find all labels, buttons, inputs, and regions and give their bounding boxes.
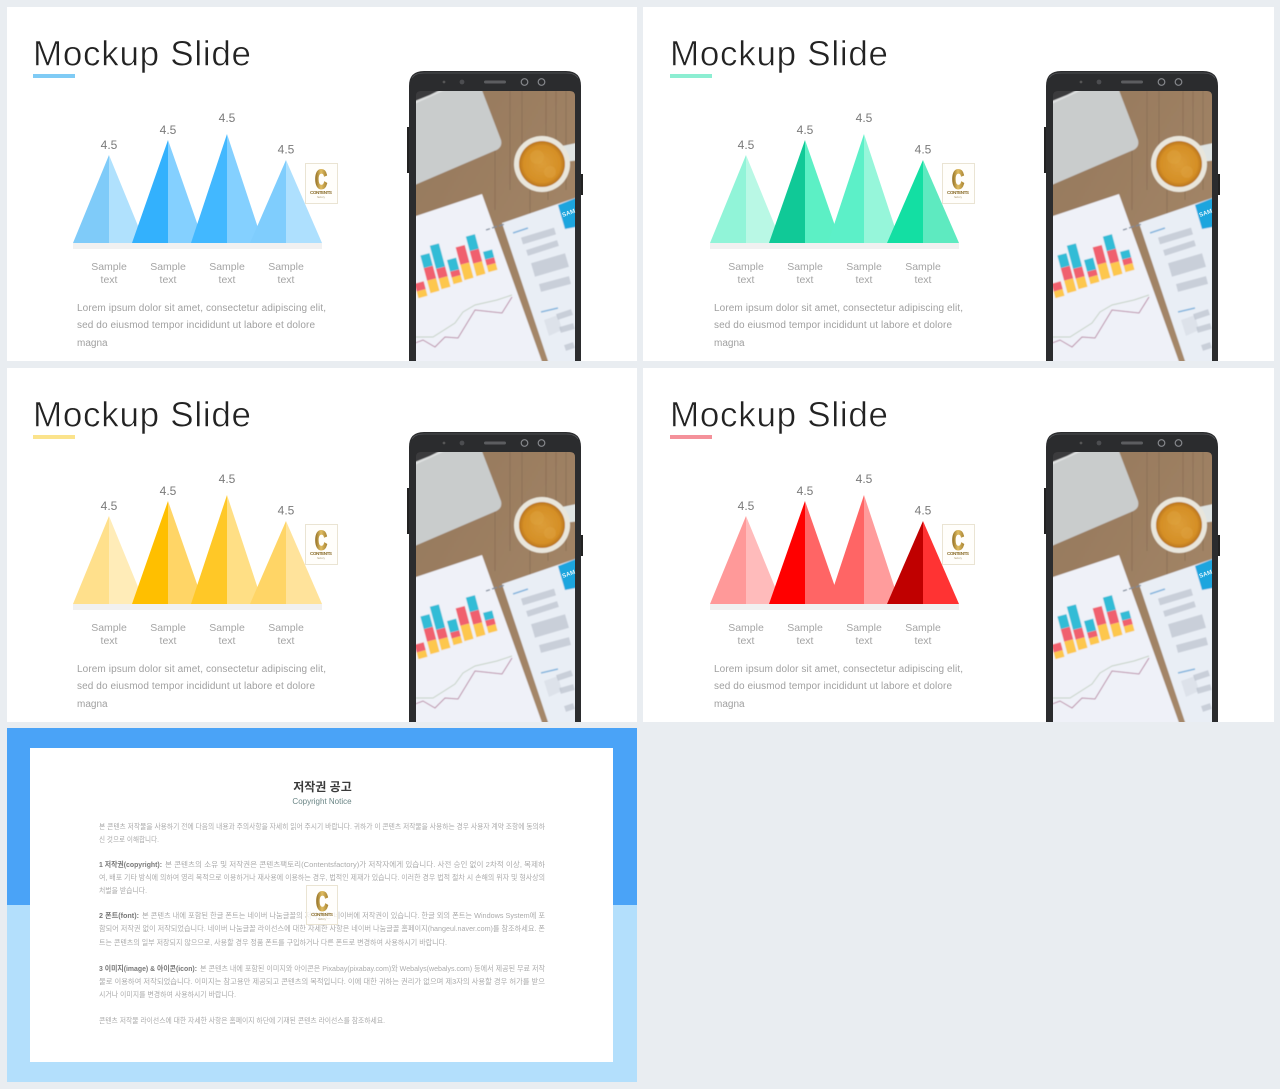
section 3: image and icon: 3 이미지(image) & 아이콘(icon): xyxy=(99,963,197,973)
triangle chart: 4.5 xyxy=(738,138,755,152)
intro paragraph: 본 콘텐츠 저작물을 사용하기 전에 다음의 내용과 주의사항을 자세히 읽어 주시기 바랍니다. 귀하가 이 콘텐츠 저작물을 사용하는 경우 사용자 계약 조항에 동의하 xyxy=(99,821,545,831)
chart labels: Sample xyxy=(150,261,186,273)
notice subheading: Copyright Notice xyxy=(292,797,352,806)
section 1: copyright: 1 저작권(copyright): xyxy=(99,859,162,869)
section 1: copyright xyxy=(99,859,545,895)
section 2: font: 본 콘텐츠 내에 포함된 한글 폰트는 네이버 나눔글꼴의 저작권은 네이버에 저작권이 있습니다. 한글 외의 폰트는 Windows System에 포 xyxy=(142,910,545,920)
chart labels: Sample xyxy=(91,261,127,273)
watermark logo: CONTENTS xyxy=(310,551,332,556)
chart labels xyxy=(91,261,304,286)
chart labels: text xyxy=(219,635,236,647)
triangle chart: 4.5 xyxy=(219,472,236,486)
phone mockup with desk photo: SAM xyxy=(562,570,576,580)
chart labels: text xyxy=(101,274,118,286)
triangle chart: 4.5 xyxy=(797,484,814,498)
watermark logo: C xyxy=(315,164,327,195)
chart labels: Sample xyxy=(91,622,127,634)
section 2: font xyxy=(99,910,545,947)
watermark logo xyxy=(942,524,974,564)
notice heading: 저작권 공고 xyxy=(293,779,352,794)
chart labels: text xyxy=(101,635,118,647)
chart labels: text xyxy=(797,635,814,647)
triangle chart: 4.5 xyxy=(160,123,177,137)
title: Mockup Slide xyxy=(33,396,251,434)
triangle chart: 4.5 xyxy=(915,504,932,518)
chart labels: text xyxy=(856,635,873,647)
chart labels: Sample xyxy=(905,261,941,273)
watermark logo: factory xyxy=(317,556,326,560)
watermark logo: CONTENTS xyxy=(947,190,969,195)
section 1: copyright: 처벌을 받습니다. xyxy=(99,885,147,895)
chart labels: Sample xyxy=(905,622,941,634)
triangle chart: 4.5 xyxy=(856,111,873,125)
chart labels: Sample xyxy=(209,261,245,273)
chart labels: Sample xyxy=(728,261,764,273)
body text: sed do eiusmod tempor incididunt ut labore et dolore xyxy=(714,681,952,692)
chart labels: text xyxy=(278,635,295,647)
body text xyxy=(714,664,963,710)
slide 3: yellow mockup xyxy=(7,368,637,731)
watermark logo xyxy=(306,164,338,204)
triangle chart: 4.5 xyxy=(101,138,118,152)
chart labels xyxy=(728,261,941,286)
body text: Lorem ipsum dolor sit amet, consectetur adipiscing elit, xyxy=(77,303,326,314)
body text: magna xyxy=(77,338,108,349)
chart labels: text xyxy=(856,274,873,286)
triangle chart xyxy=(73,111,322,249)
section 3: image and icon xyxy=(99,963,545,999)
triangle chart xyxy=(73,472,322,610)
intro paragraph xyxy=(99,821,545,844)
watermark logo xyxy=(306,886,338,924)
triangle chart: 4.5 xyxy=(278,504,295,518)
section 2: font: 함되어 저작권 없이 저작되었습니다. 네이버 나눔글꼴 라이선스에 대한 자세한 사항은 네이버 나눔글꼴 홈페이지(hangeul.naver.com)를 참조하세요. 폰 xyxy=(99,923,545,933)
section 3: image and icon: 시거나 이미지를 변경하여 사용하시기 바랍니다. xyxy=(99,989,236,999)
phone mockup with desk photo: SAM xyxy=(1199,570,1213,580)
body text: Lorem ipsum dolor sit amet, consectetur adipiscing elit, xyxy=(77,664,326,675)
title: Mockup Slide xyxy=(33,34,251,74)
phone mockup with desk photo: SAM xyxy=(1199,209,1213,219)
body text xyxy=(714,303,963,349)
section 3: image and icon: 본 콘텐츠 내에 포함된 이미지와 아이콘은 Pixabay(pixabay.com)와 Webalys(webalys.com) 등에서 제공된 무료 저작 xyxy=(200,963,545,973)
watermark logo xyxy=(942,164,974,204)
chart labels xyxy=(728,622,941,647)
watermark logo: factory xyxy=(318,917,327,921)
triangle chart: 4.5 xyxy=(219,111,236,125)
section 3: image and icon: 물로 이용하여 저작되었습니다. 이미지는 참고용만 제공되고 콘텐츠의 목적입니다. 이에 대한 귀하는 권리가 없으며 제3자의 사용할 경우 허가를 받으 xyxy=(99,976,545,986)
phone mockup with desk photo xyxy=(407,432,583,731)
body text xyxy=(77,664,326,710)
chart labels xyxy=(91,622,304,647)
body text: magna xyxy=(714,338,745,349)
watermark logo: factory xyxy=(954,556,963,560)
watermark logo: C xyxy=(315,525,327,556)
chart labels: Sample xyxy=(728,622,764,634)
chart labels: Sample xyxy=(787,261,823,273)
triangle chart: 4.5 xyxy=(797,123,814,137)
triangle chart: 4.5 xyxy=(160,484,177,498)
watermark logo: CONTENTS xyxy=(947,551,969,556)
watermark logo: factory xyxy=(954,195,963,199)
chart labels: Sample xyxy=(268,622,304,634)
chart labels: Sample xyxy=(268,261,304,273)
slide 1: blue mockup xyxy=(7,7,637,370)
chart labels: Sample xyxy=(787,622,823,634)
chart labels: Sample xyxy=(209,622,245,634)
triangle chart: 4.5 xyxy=(738,499,755,513)
section 1: copyright: 본 콘텐츠의 소유 및 저작권은 콘텐츠팩토리(Contentsfactory)가 저작자에게 있습니다. 사전 승인 없이 2차적 이상, 복제하 xyxy=(165,859,545,869)
chart labels: Sample xyxy=(846,622,882,634)
section 1: copyright: 여, 배포 기타 방식에 의하여 영리 목적으로 이용하거나 재사용에 이용하는 경우, 법적인 제재가 있습니다. 이러한 경우 법적 절차 시 손해의 위자 및 형사상의 xyxy=(99,872,545,882)
title: Mockup Slide xyxy=(670,396,888,434)
closing line: 콘텐츠 저작물 라이선스에 대한 자세한 사항은 홈페이지 하단에 기재된 콘텐츠 라이선스를 참조하세요. xyxy=(99,1015,385,1025)
watermark logo: C xyxy=(316,886,328,917)
chart labels: Sample xyxy=(150,622,186,634)
chart labels: text xyxy=(278,274,295,286)
body text: Lorem ipsum dolor sit amet, consectetur adipiscing elit, xyxy=(714,664,963,675)
chart labels: text xyxy=(160,274,177,286)
triangle chart: 4.5 xyxy=(278,142,295,156)
body text xyxy=(77,303,326,349)
body text: sed do eiusmod tempor incididunt ut labore et dolore xyxy=(714,320,952,331)
watermark logo: C xyxy=(952,164,964,195)
phone mockup with desk photo: SAM xyxy=(562,209,576,219)
triangle chart: 4.5 xyxy=(915,142,932,156)
triangle chart: 4.5 xyxy=(856,472,873,486)
chart labels: text xyxy=(797,274,814,286)
slide 4: red mockup xyxy=(643,368,1274,731)
title underline xyxy=(33,435,75,439)
body text: Lorem ipsum dolor sit amet, consectetur adipiscing elit, xyxy=(714,303,963,314)
chart labels: text xyxy=(160,635,177,647)
chart labels: text xyxy=(915,274,932,286)
body text: magna xyxy=(77,699,108,710)
chart labels: text xyxy=(738,274,755,286)
watermark logo: CONTENTS xyxy=(311,912,333,917)
chart labels: text xyxy=(219,274,236,286)
slide 2: green mockup xyxy=(643,7,1274,370)
watermark logo xyxy=(306,524,338,564)
chart labels: text xyxy=(915,635,932,647)
watermark logo: CONTENTS xyxy=(310,190,332,195)
chart labels: text xyxy=(738,635,755,647)
body text: sed do eiusmod tempor incididunt ut labore et dolore xyxy=(77,320,315,331)
body text: magna xyxy=(714,699,745,710)
title: Mockup Slide xyxy=(670,34,888,74)
watermark logo: C xyxy=(952,525,964,556)
chart labels: Sample xyxy=(846,261,882,273)
triangle chart xyxy=(710,111,959,249)
slide 5: copyright notice xyxy=(7,728,637,1082)
title underline xyxy=(670,74,712,78)
title underline xyxy=(33,74,75,78)
phone mockup with desk photo xyxy=(1044,71,1220,370)
title underline xyxy=(670,435,712,439)
section 2: font: 2 폰트(font): xyxy=(99,911,139,920)
watermark logo: factory xyxy=(317,195,326,199)
section 2: font: 트는 콘텐츠의 일부 저장되지 않으므로, 사용할 경우 정품 폰트를 구입하거나 다른 폰트로 변경하여 사용하시기 바랍니다. xyxy=(99,937,447,947)
triangle chart xyxy=(710,472,959,610)
phone mockup with desk photo xyxy=(1044,432,1220,731)
intro paragraph: 신 것으로 이해합니다. xyxy=(99,834,159,844)
body text: sed do eiusmod tempor incididunt ut labore et dolore xyxy=(77,681,315,692)
triangle chart: 4.5 xyxy=(101,499,118,513)
phone mockup with desk photo xyxy=(407,71,583,370)
